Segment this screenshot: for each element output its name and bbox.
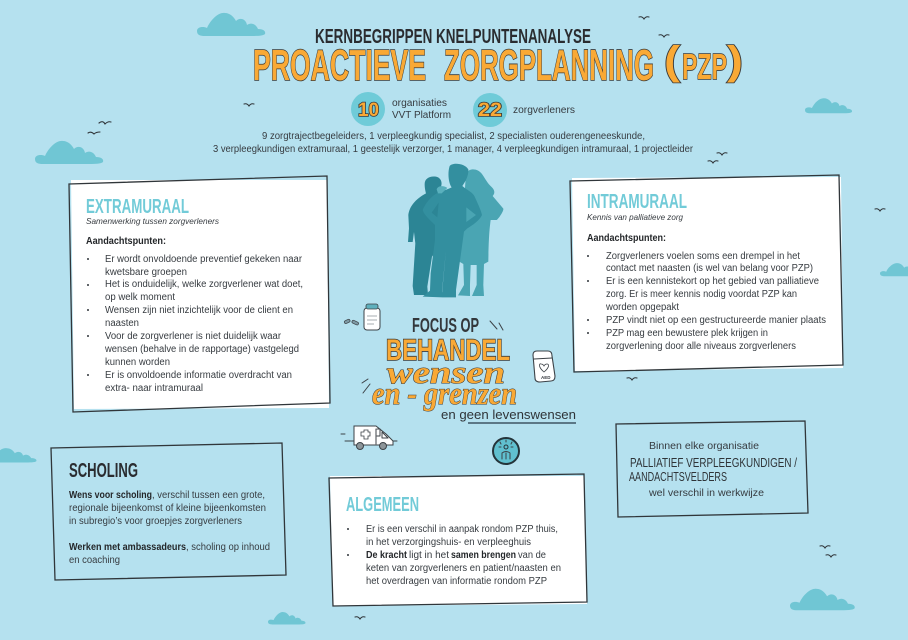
bullet list: Er is een kennistekort op het gebied van palliatieve — [606, 276, 819, 287]
bullet list: keten van zorgverleners en patient/naasten en — [366, 563, 561, 574]
panel: extramuraal — [69, 176, 330, 412]
bullet list: in het verzorgingshuis- en verpleeghuis — [366, 537, 531, 548]
text block: ambassadeurs: , scholing op inhoud — [186, 542, 270, 553]
icon: ambulance — [341, 426, 397, 450]
subtitle: KERNBEGRIPPEN KNELPUNTENANALYSE — [315, 26, 591, 48]
main title: ) — [727, 39, 743, 83]
panel: palliatief verpleegkundigen — [616, 421, 808, 517]
bullet list: samen brengen — [451, 550, 516, 561]
en geen levenswensen: en geen levenswensen — [441, 407, 576, 422]
focus heading — [372, 315, 576, 422]
bullet list: Er is een verschil in aanpak rondom PZP thuis, — [366, 524, 558, 535]
bullet list: extra- naar intramuraal — [105, 383, 203, 394]
stat: 22 zorgverleners: zorgverleners — [513, 105, 575, 116]
icon: AED device: AED — [541, 375, 551, 380]
main title: PROACTIEVE — [253, 41, 426, 90]
bullet list: zorgverlening door alle niveaus zorgverleners — [606, 341, 796, 352]
panel: palliatief verpleegkundigen: Binnen elke organisatie — [649, 441, 759, 452]
main title: PZP — [682, 46, 727, 87]
bullet list: contact met naasten (is wel van belang voor PZP) — [606, 263, 813, 274]
bullet list: kunnen worden — [105, 357, 170, 368]
bullet list: De kracht — [366, 550, 408, 561]
subheading: Kennis van palliatieve zorg — [587, 212, 683, 222]
title block — [253, 26, 743, 90]
bullet list: op welk moment — [105, 292, 175, 303]
stats — [351, 92, 575, 127]
bullet list: ligt in het — [409, 550, 449, 561]
main title: ( — [664, 39, 681, 83]
bullet list: Voor de zorgverlener is niet duidelijk waar — [105, 331, 282, 342]
bullet list: van de — [518, 550, 546, 561]
panel: palliatief verpleegkundigen: PALLIATIEF VERPLEEGKUNDIGEN / — [630, 455, 797, 470]
label: Aandachtspunten: — [587, 233, 666, 244]
bullet list: Zorgverleners voelen soms een drempel in het — [606, 251, 800, 262]
text block: ambassadeurs: en coaching — [69, 555, 120, 566]
bullet list: PZP mag een bewustere plek krijgen in — [606, 328, 768, 339]
subheading: Samenwerking tussen zorgverleners — [86, 216, 220, 226]
illustration: three people silhouette — [408, 164, 503, 297]
text block: ambassadeurs — [69, 542, 270, 566]
stat: 10 organisaties: organisaties — [392, 98, 447, 109]
bullet list — [347, 524, 561, 587]
bullet list: PZP vindt niet op een gestructureerde manier plaats — [606, 315, 826, 326]
en grenzen: en - grenzen — [372, 375, 517, 411]
bullet list: Er wordt onvoldoende preventief gekeken naar — [105, 254, 303, 265]
text block: wens voor scholing — [69, 490, 266, 527]
main title — [253, 39, 743, 90]
icon: person in circle — [493, 438, 519, 464]
heading: algemeen: ALGEMEEN — [346, 494, 419, 516]
icon: AED device — [533, 351, 555, 382]
behandel: BEHANDEL — [386, 334, 510, 367]
bullet list: Het is onduidelijk, welke zorgverlener wat doet, — [105, 279, 303, 290]
participants text: 9 zorgtrajectbegeleiders, 1 verpleegkundig specialist, 2 specialisten ouderengeneeskunde, — [262, 131, 645, 142]
heading: extramuraal: EXTRAMURAAL — [86, 196, 189, 218]
heading: scholing: SCHOLING — [69, 460, 138, 482]
panel: scholing — [51, 443, 286, 580]
wensen: wensen — [387, 354, 505, 390]
text block: wens voor scholing: in subregio’s voor groepjes zorgverleners — [69, 516, 242, 527]
heading: intramuraal: INTRAMURAAL — [587, 191, 687, 213]
text block: ambassadeurs: Werken met ambassadeurs — [69, 542, 186, 553]
bullet list: wensen (behalve in de rapportage) vastgelegd — [104, 344, 299, 355]
label: Aandachtspunten: — [86, 236, 166, 247]
bullet list: naasten — [105, 318, 139, 329]
bullet list: worden opgepakt — [605, 302, 679, 313]
participants text: 3 verpleegkundigen extramuraal, 1 geestelijk verzorger, 1 manager, 4 verpleegkundigen intramuraal, 1 projectleider — [213, 144, 694, 155]
icon: pills — [344, 319, 359, 326]
text block: wens voor scholing: , verschil tussen een grote, — [152, 490, 265, 501]
bullet list: Wensen zijn niet inzichtelijk voor de client en — [105, 305, 293, 316]
panel: intramuraal — [570, 175, 843, 372]
stat: 10 organisaties — [351, 92, 451, 126]
panel: palliatief verpleegkundigen: AANDACHTSVELDERS — [629, 469, 727, 484]
focus op: FOCUS OP — [412, 315, 479, 337]
text block: wens voor scholing: regionale bijeenkomst of kleine bijeenkomsten — [69, 503, 266, 514]
stat: 22 zorgverleners — [473, 93, 575, 127]
stat: 10 organisaties: 10 — [358, 100, 379, 121]
bullet list: het overdragen van informatie rondom PZP — [366, 576, 547, 587]
bullet list: Er is onvoldoende informatie overdracht van — [105, 370, 292, 381]
icon: medicine jar — [364, 304, 380, 330]
stat: 22 zorgverleners: 22 — [478, 100, 502, 121]
bullet list: zorg. Er is meer kennis nodig voordat PZP kan — [606, 289, 797, 300]
bullet list: kwetsbare groepen — [105, 267, 187, 278]
panel: palliatief verpleegkundigen: wel verschil in werkwijze — [648, 488, 764, 499]
participants text — [213, 131, 694, 155]
bullet list — [587, 251, 826, 352]
bullet list — [87, 254, 303, 394]
text block: wens voor scholing: Wens voor scholing — [69, 490, 152, 501]
panel: algemeen — [329, 474, 587, 606]
accent marks — [362, 321, 503, 393]
stat: 10 organisaties: VVT Platform — [392, 110, 451, 121]
main title: ZORGPLANNING — [444, 41, 654, 90]
